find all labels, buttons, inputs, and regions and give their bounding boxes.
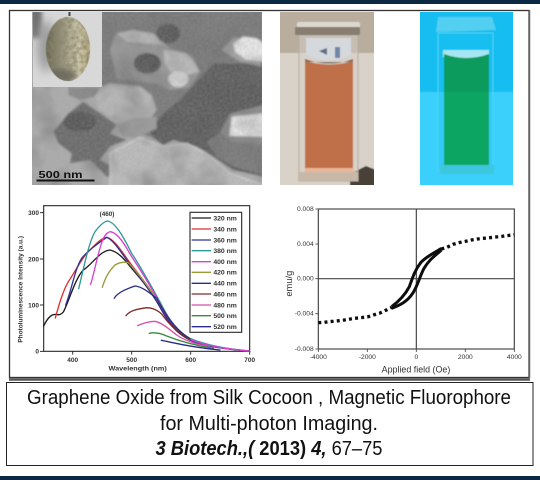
x axis title: Applied field (Oe) bbox=[382, 365, 450, 375]
x axis tick labels: 700 bbox=[244, 357, 255, 364]
photo: fluorescent green cuvette bbox=[418, 10, 515, 187]
legend: 500 nm bbox=[213, 313, 237, 320]
peak label: (460) bbox=[100, 211, 114, 218]
x axis tick labels bbox=[67, 357, 255, 364]
y axis tick labels bbox=[28, 210, 39, 356]
x axis tick labels: 4000 bbox=[507, 354, 522, 361]
x axis tick labels: 500 bbox=[126, 357, 137, 364]
x axis title: Wavelength (nm) bbox=[108, 366, 167, 373]
line chart: photoluminescence spectra bbox=[17, 206, 255, 373]
tick marks bbox=[315, 209, 514, 352]
legend bbox=[190, 212, 242, 332]
scale bar: 500 nm bbox=[36, 169, 94, 182]
caption box bbox=[6, 382, 533, 466]
plot axes bbox=[44, 206, 250, 351]
caption title line 2: for Multi-photon Imaging. bbox=[160, 413, 378, 435]
y axis tick labels: 0.004 bbox=[297, 241, 314, 248]
y axis title: emu/g bbox=[284, 271, 294, 297]
legend: 380 nm bbox=[213, 248, 237, 255]
legend: 480 nm bbox=[213, 302, 237, 309]
x axis tick labels: 600 bbox=[185, 357, 196, 364]
legend: 320 nm bbox=[213, 215, 237, 222]
legend: 400 nm bbox=[213, 259, 237, 266]
legend: 520 nm bbox=[213, 324, 237, 331]
y axis tick labels: -0.008 bbox=[295, 346, 314, 353]
main frame bbox=[9, 10, 530, 380]
y axis tick labels: 200 bbox=[28, 256, 39, 263]
top navy bar bbox=[0, 0, 540, 4]
scale bar: 500 nm: 500 nm bbox=[38, 169, 82, 181]
TEM micrograph bbox=[30, 10, 263, 187]
scatter chart: magnetic hysteresis bbox=[284, 206, 522, 375]
tick marks bbox=[40, 213, 250, 355]
y axis tick labels: -0.004 bbox=[295, 311, 314, 318]
x axis tick labels: 400 bbox=[67, 357, 78, 364]
plot frame and zero lines bbox=[318, 209, 514, 349]
caption title line 1: Graphene Oxide from Silk Cocoon , Magnetic Fluorophore bbox=[27, 387, 511, 409]
y axis tick labels: 300 bbox=[28, 210, 39, 217]
x axis tick labels: -4000 bbox=[310, 354, 327, 361]
hysteresis loop bbox=[318, 235, 514, 323]
bottom navy bar bbox=[0, 476, 540, 480]
legend: 340 nm bbox=[213, 226, 237, 233]
inset: silk cocoon photo bbox=[30, 8, 102, 87]
photo: orange cuvette bbox=[278, 10, 376, 187]
x axis tick labels: -2000 bbox=[359, 354, 376, 361]
legend: 420 nm bbox=[213, 270, 237, 277]
y axis tick labels: 0.000 bbox=[297, 276, 314, 283]
y axis tick labels: 100 bbox=[28, 302, 39, 309]
x axis tick labels bbox=[310, 354, 522, 361]
legend: 460 nm bbox=[213, 291, 237, 298]
y axis tick labels bbox=[295, 206, 314, 353]
x axis tick labels: 2000 bbox=[458, 354, 473, 361]
x axis tick labels: 0 bbox=[414, 354, 418, 361]
legend: 360 nm bbox=[213, 237, 237, 244]
y axis tick labels: 0 bbox=[35, 349, 39, 356]
legend: 440 nm bbox=[213, 281, 237, 288]
spectra curves bbox=[44, 221, 250, 351]
y axis title: Photoluminescence Intensity (a.u.) bbox=[17, 236, 24, 343]
citation line: 3 Biotech.,( 2013) 4, 67–75 bbox=[156, 438, 382, 460]
y axis tick labels: 0.008 bbox=[297, 206, 314, 213]
